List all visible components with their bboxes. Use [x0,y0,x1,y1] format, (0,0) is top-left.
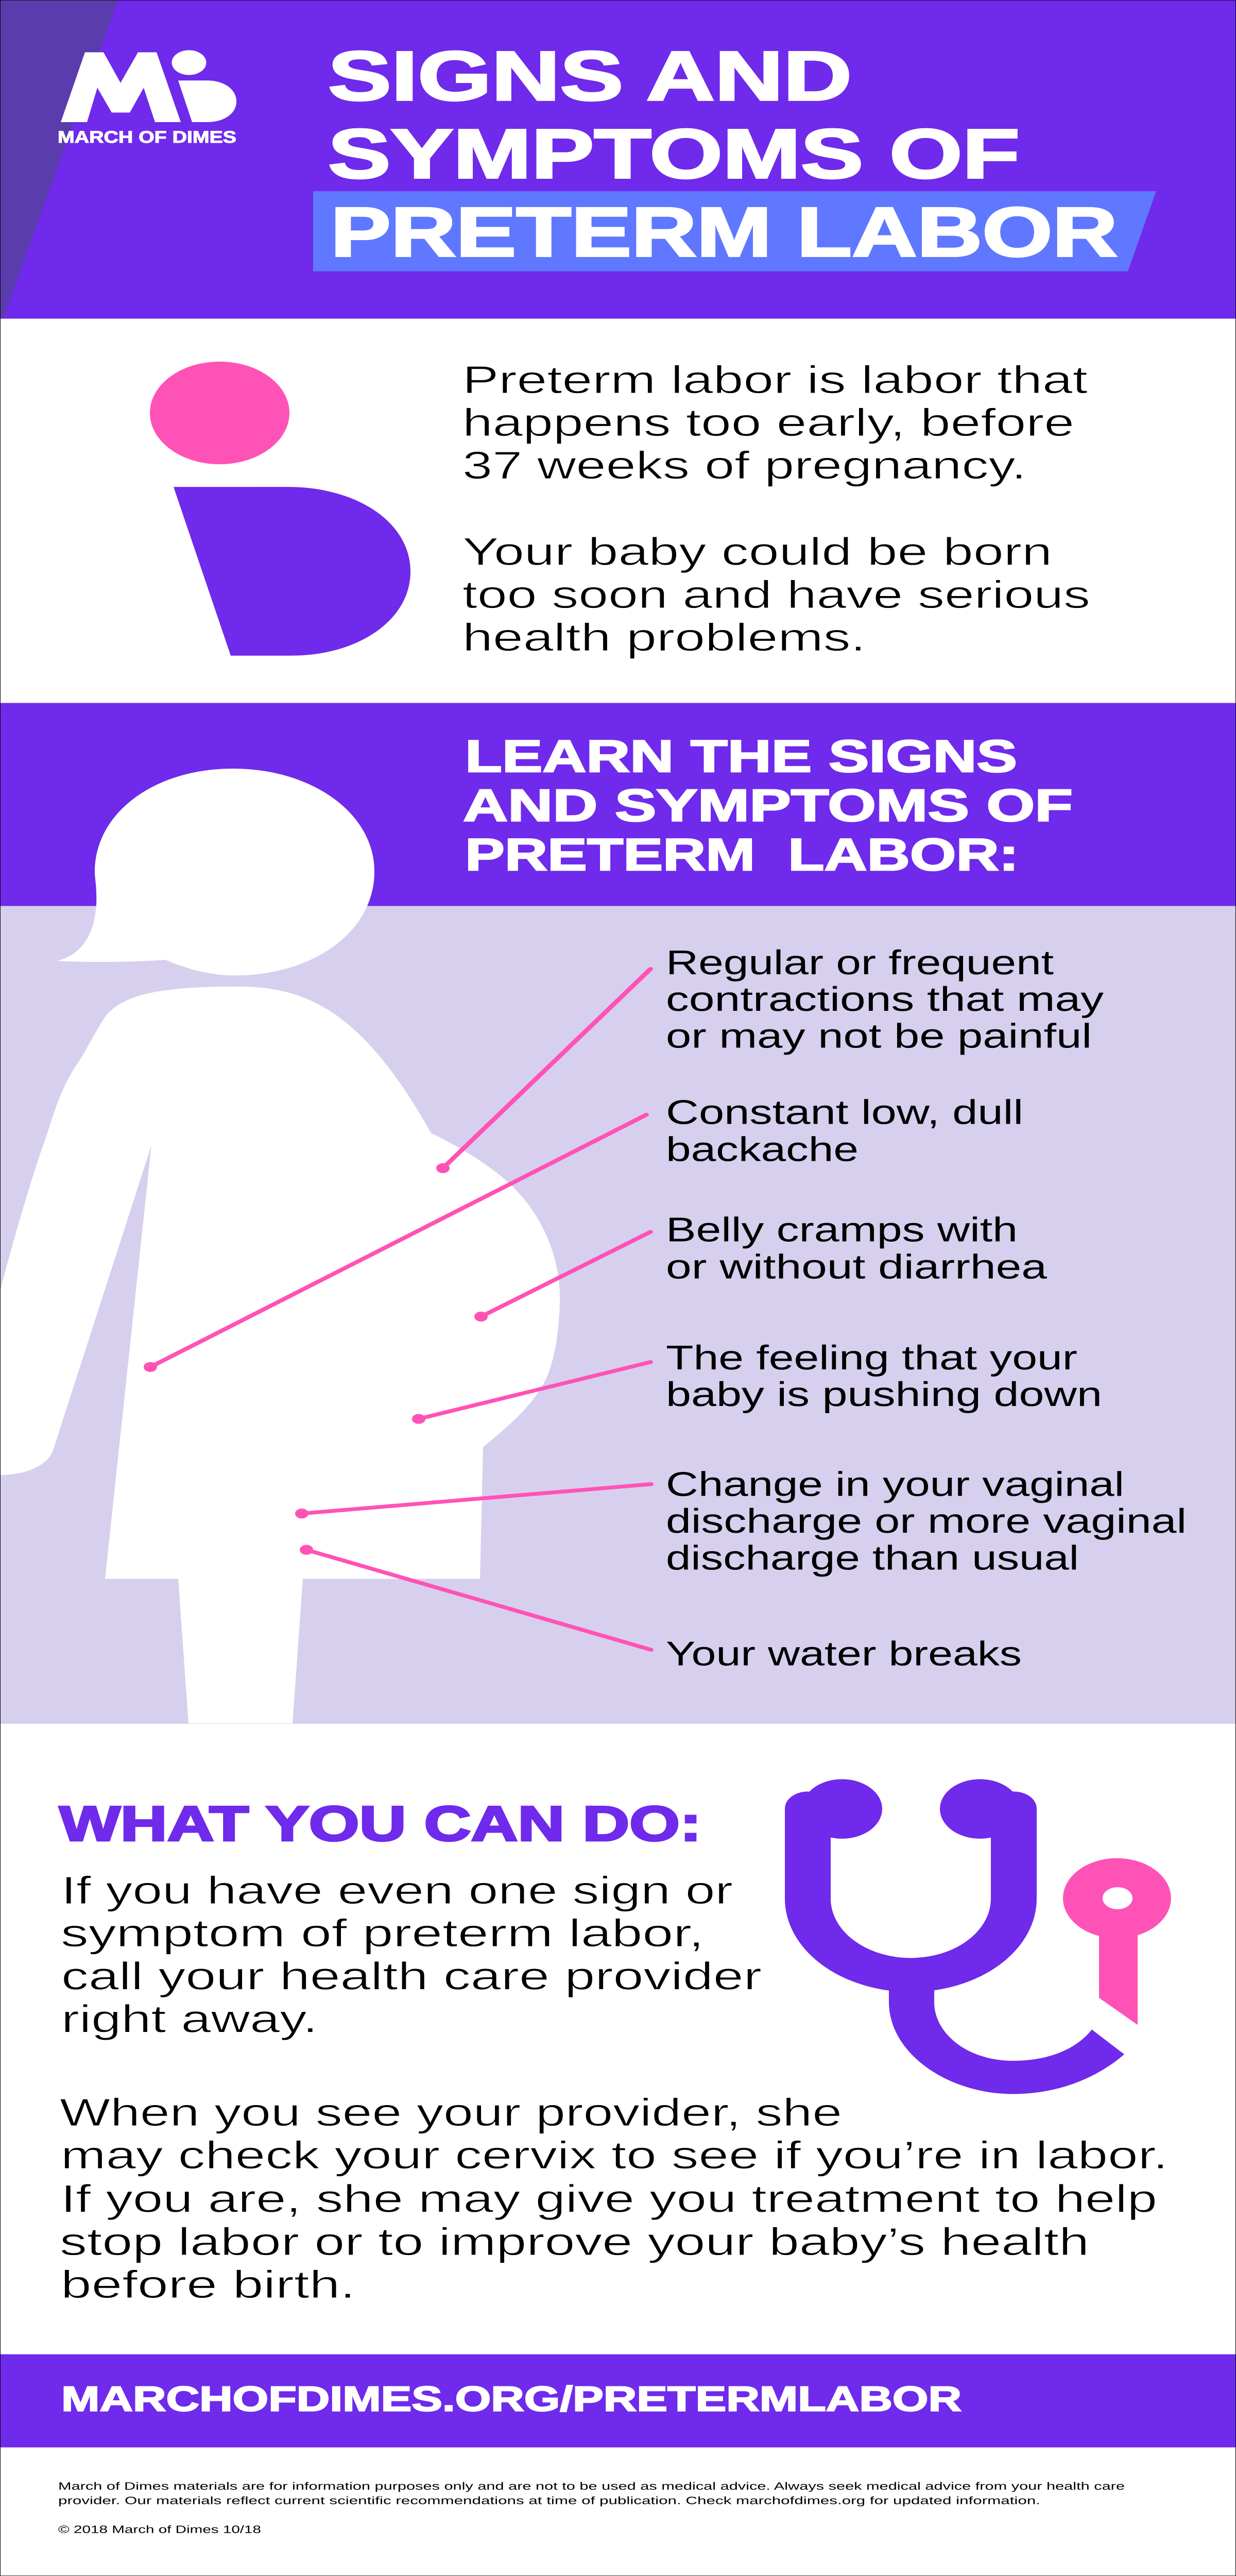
panel: symptoms background [0,906,1236,1724]
footer: disclaimer [58,2480,1125,2535]
heading: learn the signs [463,731,1073,880]
symptom: pushing down: baby is pushing down [666,1376,1102,1414]
symptom: discharge: Change in your vaginal [666,1465,1124,1504]
text: what the provider may do: before birth. [61,2263,355,2306]
symptom: contractions: Regular or frequent [666,944,1054,982]
symptom: pushing down [666,1339,1102,1414]
panel: website band: MARCHOFDIMES.ORG/PRETERMLABOR [61,2380,962,2418]
head and hair [57,769,374,975]
title [328,37,1118,271]
symptom: belly cramps: or without diarrhea [666,1248,1048,1286]
text: what the provider may do: If you are, she may give you treatment to help [61,2177,1157,2221]
text: call your provider: If you have even one sign or [61,1869,733,1912]
logo: March of Dimes: MARCH OF DIMES [58,128,236,146]
symptom: contractions: or may not be painful [666,1017,1092,1055]
text: what preterm labor is [462,358,1090,659]
text: what the provider may do: When you see your provider, she [60,2091,842,2134]
panel: signs heading band [0,703,1236,906]
text: call your provider: right away. [61,1997,318,2041]
text: what preterm labor is: happens too early, before [462,401,1074,444]
text: what the provider may do: may check your cervix to see if you’re in labor. [61,2133,1168,2177]
text: what preterm labor is: Preterm labor is labor that [462,358,1088,401]
panel: website band [0,2354,1236,2447]
symptom: discharge: discharge or more vaginal [666,1502,1187,1540]
pointer 2 [145,1115,646,1371]
icon: person i [150,362,410,656]
panel: what you can do [59,1779,1171,2306]
icon: stethoscope [802,1779,1171,2094]
pointer 5 [296,1484,651,1518]
symptom: backache [666,1093,1023,1168]
text: call your provider: call your health care provider [61,1954,762,1998]
pointer 6 [301,1546,651,1650]
text: call your provider: symptom of preterm labor, [61,1911,704,1955]
pointer 4 [413,1362,650,1423]
footer: disclaimer: provider. Our materials reflect current scientific recommendations at time of publication. Check marchofdimes.org for updated information. [58,2495,1040,2506]
text: what preterm labor is: health problems. [462,616,866,659]
footer: disclaimer: March of Dimes materials are for information purposes only and are not to be used as medical advice. Always seek medical advice from your health care [58,2480,1125,2492]
heading: learn the signs: AND SYMPTOMS OF [463,780,1073,831]
panel: introduction [150,358,1090,659]
body [0,987,560,1723]
symptom: discharge [666,1465,1187,1577]
list: symptoms [666,944,1187,1673]
logo: March of Dimes [58,50,236,146]
pointer 3 [475,1232,650,1321]
heading: learn the signs: PRETERM LABOR: [465,829,1019,880]
title: SYMPTOMS OF [328,114,1020,193]
pointers: symptom callout lines [145,969,651,1650]
text: what preterm labor is: 37 weeks of pregnancy. [462,444,1026,487]
text: what preterm labor is: Your baby could be born [462,530,1052,573]
text: what the provider may do [60,2091,1168,2306]
symptom: discharge: discharge than usual [666,1539,1079,1577]
symptom: belly cramps: Belly cramps with [666,1211,1018,1249]
title highlight bar [313,191,1156,272]
symptom: contractions [666,944,1104,1055]
text: what the provider may do: stop labor or to improve your baby’s health [60,2220,1089,2263]
title: SIGNS AND [328,37,852,115]
footer: disclaimer: © 2018 March of Dimes 10/18 [58,2523,261,2535]
title: PRETERM LABOR [331,193,1118,271]
heading: learn the signs: LEARN THE SIGNS [465,731,1017,782]
text: call your provider [61,1869,762,2041]
pointer 1 [437,969,650,1173]
panel: header banner [0,0,1236,319]
symptom: belly cramps [666,1211,1048,1286]
text: what preterm labor is: too soon and have serious [462,573,1090,616]
symptom: backache: Constant low, dull [666,1093,1023,1131]
illustration: pregnant woman silhouette [0,769,560,1723]
symptom: water breaks: Your water breaks [666,1635,1022,1673]
heading: WHAT YOU CAN DO: [59,1797,701,1851]
symptom: backache: backache [666,1130,859,1168]
symptom: contractions: contractions that may [666,980,1104,1019]
symptom: pushing down: The feeling that your [666,1339,1077,1377]
